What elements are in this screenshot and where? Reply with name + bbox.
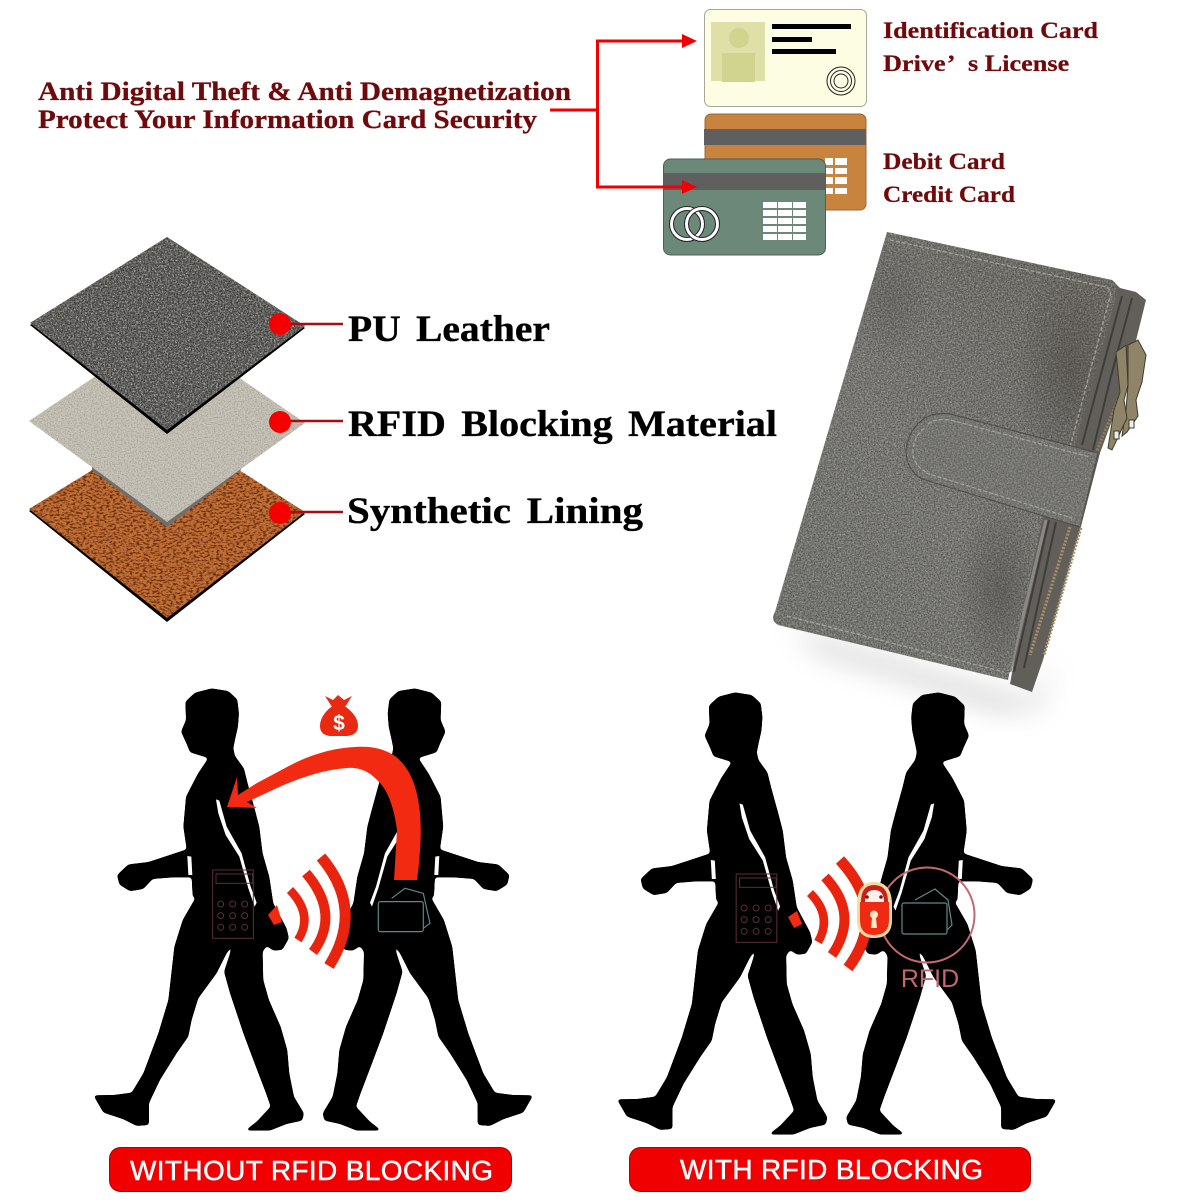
signal waves: [290, 857, 345, 966]
wallet strap: [906, 414, 1098, 527]
icon: card reader: [213, 870, 253, 938]
icon: card reader: [736, 874, 777, 942]
silhouette: reader person: [617, 692, 827, 1135]
layer: PU leather: [30, 237, 305, 434]
icon: orange debit card: [704, 114, 866, 210]
button: with RFID blocking: WITH RFID BLOCKING: [680, 1154, 983, 1185]
button: without RFID blocking: [110, 1148, 512, 1192]
signal source: [268, 905, 282, 925]
wallet front body: [773, 232, 1117, 680]
arrow: bracket to cards: [550, 34, 697, 194]
material layers: [29, 237, 305, 622]
wallet shading: [868, 267, 1104, 658]
headline: anti digital theft: Protect Your Information Card Security: [38, 105, 537, 134]
material labels: [347, 309, 777, 532]
material labels: Synthetic Lining: [347, 491, 644, 532]
icon: wallet in pocket: [902, 889, 952, 934]
icon: padlock: [857, 882, 892, 938]
signal source: [788, 911, 802, 928]
arrow: stolen data: [227, 747, 421, 880]
headline: anti digital theft: [38, 77, 572, 134]
wallet shadow: [790, 628, 1055, 712]
scene: with RFID blocking: [617, 692, 1057, 1135]
button: without RFID blocking: WITHOUT RFID BLOCKING: [130, 1155, 493, 1186]
material labels: RFID Blocking Material: [348, 404, 777, 445]
material labels: PU Leather: [348, 309, 550, 350]
layer: synthetic lining: [29, 424, 305, 622]
silhouette: victim person: [323, 688, 533, 1131]
silhouette: reader person: [93, 688, 304, 1131]
headline: anti digital theft: Anti Digital Theft & Anti Demagnetization: [38, 77, 572, 106]
wallet stitching: [787, 240, 1110, 672]
zipper pulls: [1108, 340, 1146, 450]
layer: RFID blocking material: [29, 328, 305, 527]
callout dots and leaders: [269, 313, 343, 524]
ring label: RFID: [901, 965, 959, 993]
wallet back layers: [1010, 280, 1146, 692]
card labels: Credit Card: [883, 182, 1015, 207]
card labels: Debit Card: [883, 149, 1005, 174]
icon: money bag: $: [333, 712, 345, 735]
icon: green credit card: [664, 159, 826, 255]
icon: ID card: [704, 10, 866, 106]
card labels: Drive’ s License: [883, 51, 1069, 77]
card labels: Identification Card: [883, 18, 1098, 43]
scene: without RFID blocking: [93, 688, 533, 1131]
icon: wallet in pocket: [378, 888, 430, 932]
wallet photo: [773, 232, 1146, 712]
blocking ring: [880, 868, 974, 962]
zipper line: [1030, 527, 1070, 655]
card labels: [883, 18, 1098, 207]
button: with RFID blocking: [630, 1148, 1030, 1192]
icon: money bag: [320, 695, 358, 736]
silhouette: protected person: [846, 692, 1057, 1135]
signal waves: [810, 860, 867, 968]
